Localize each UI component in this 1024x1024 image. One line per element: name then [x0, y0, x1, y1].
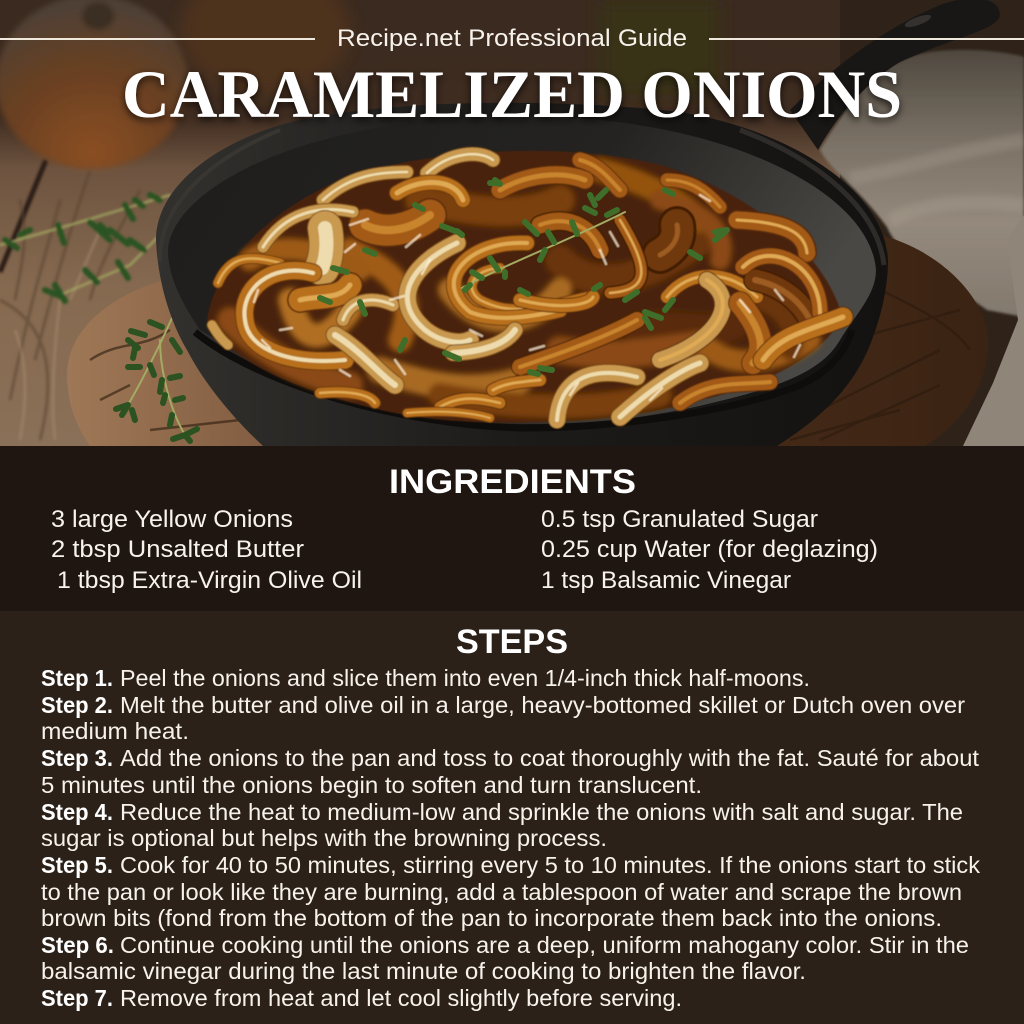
- steps text: medium heat.: [41, 718, 189, 744]
- ingredients list left column: 1 tbsp Extra-Virgin Olive Oil: [57, 567, 362, 594]
- wooden table background: [0, 0, 1024, 446]
- steps text: Peel the onions and slice them into even 1/4-inch thick half-moons.: [120, 665, 810, 691]
- steps text: Cook for 40 to 50 minutes, stirring every 5 to 10 minutes. If the onions start to stick: [120, 852, 981, 878]
- subtitle rule right: [709, 38, 1024, 40]
- steps text: Step 5.: [41, 852, 113, 878]
- steps text: Add the onions to the pan and toss to coat thoroughly with the fat. Sauté for about: [120, 745, 980, 771]
- steps text: Step 6.: [41, 932, 114, 958]
- steps text: Melt the butter and olive oil in a large, heavy-bottomed skillet or Dutch oven over: [120, 692, 965, 718]
- steps text: Step 4.: [41, 799, 113, 825]
- steps text: Step 3.: [41, 745, 113, 771]
- steps text: sugar is optional but helps with the browning process.: [41, 825, 607, 851]
- ingredients list right column: 0.5 tsp Granulated Sugar: [541, 506, 818, 533]
- ingredients list left column: 2 tbsp Unsalted Butter: [51, 536, 304, 563]
- wooden cutting board: [67, 235, 988, 446]
- steps text: Continue cooking until the onions are a deep, uniform mahogany color. Stir in the: [120, 932, 969, 958]
- skillet body: [156, 103, 888, 446]
- panel: steps: [0, 611, 1024, 1024]
- ingredients list right column: 0.25 cup Water (for deglazing): [541, 536, 878, 563]
- steps text: 5 minutes until the onions begin to soften and turn translucent.: [41, 772, 702, 798]
- steps text: brown bits (fond from the bottom of the pan to incorporate them back into the onions.: [41, 905, 942, 931]
- title: CARAMELIZED ONIONS: [122, 56, 902, 132]
- steps text: Remove from heat and let cool slightly before serving.: [120, 985, 682, 1011]
- caramelized onions: [207, 151, 843, 423]
- steps text: Step 1.: [41, 665, 113, 691]
- ingredients list right column: 1 tsp Balsamic Vinegar: [541, 567, 791, 594]
- blurred whole onion: [0, 0, 188, 169]
- subtitle rule left: [0, 38, 315, 40]
- blurred background onion and oil bottle: [180, 0, 720, 95]
- thyme garnish on onions: [320, 180, 727, 374]
- panel: ingredients: [0, 446, 1024, 611]
- ingredients list left column: 3 large Yellow Onions: [51, 506, 293, 533]
- thyme sprig on board: [116, 318, 197, 441]
- photo: skillet of caramelized onions: [0, 0, 1024, 446]
- ingredients heading: INGREDIENTS: [389, 463, 636, 501]
- steps heading: STEPS: [456, 623, 568, 661]
- blurred thyme on table: [0, 195, 170, 301]
- steps text: Reduce the heat to medium-low and sprinkle the onions with salt and sugar. The: [120, 799, 963, 825]
- ingredients list left column: [51, 506, 362, 594]
- skillet handle: [790, 0, 1000, 150]
- subtitle: Recipe.net Professional Guide: [337, 25, 687, 52]
- linen cloth: [820, 50, 1024, 446]
- steps text: to the pan or look like they are burning, add a tablespoon of water and scrape the brown: [41, 879, 962, 905]
- steps text: balsamic vinegar during the last minute of cooking to brighten the flavor.: [41, 958, 806, 984]
- steps text: Step 2.: [41, 692, 113, 718]
- steps text: [41, 665, 981, 1011]
- steps text: Step 7.: [41, 985, 113, 1011]
- ingredients list right column: [541, 506, 878, 594]
